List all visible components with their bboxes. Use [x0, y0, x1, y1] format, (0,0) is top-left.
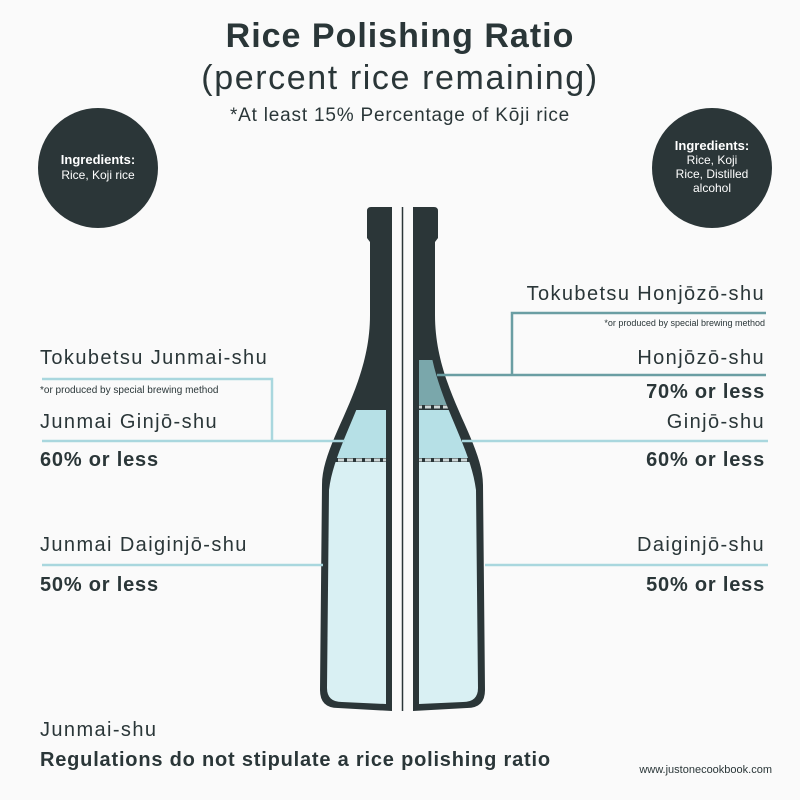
badge: left ingredients [38, 108, 158, 228]
text: *or produced by special brewing method [40, 385, 218, 396]
text: Junmai Daiginjō-shu [40, 534, 248, 556]
center divider [402, 207, 404, 711]
bottle: right half (Honjozo) [413, 207, 485, 711]
text: Daiginjō-shu [637, 534, 765, 556]
text: 60% or less [646, 449, 765, 471]
text: Ginjō-shu [667, 411, 765, 433]
right labels: Tokubetsu Honjōzō-shu [527, 283, 765, 305]
subtitle: (percent rice remaining) [201, 59, 599, 97]
text: Junmai-shu [40, 719, 157, 741]
text: 70% or less [646, 381, 765, 403]
text: 50% or less [646, 574, 765, 596]
text: 60% or less [40, 449, 159, 471]
leader lines [42, 313, 768, 565]
badge: right ingredients: Rice, Koji [687, 153, 737, 167]
title: Rice Polishing Ratio [226, 17, 574, 55]
badge: right ingredients: Rice, Distilled [676, 167, 748, 181]
bottle and leader lines [42, 207, 768, 711]
text: Honjōzō-shu [637, 347, 765, 369]
badge: left ingredients: Rice, Koji rice [61, 168, 135, 182]
badge: right ingredients: Ingredients: [675, 138, 749, 153]
text: Junmai Ginjō-shu [40, 411, 218, 433]
text: *or produced by special brewing method [604, 318, 765, 328]
badge: left ingredients: Ingredients: [61, 152, 135, 167]
url: www.justonecookbook.com [639, 764, 772, 776]
badge: right ingredients [652, 108, 772, 228]
text: 50% or less [40, 574, 159, 596]
text: Regulations do not stipulate a rice polishing ratio [40, 749, 551, 771]
note: *At least 15% Percentage of Kōji rice [230, 105, 570, 126]
bottle: left half (Junmai) [300, 207, 400, 712]
left labels: Tokubetsu Junmai-shu [40, 347, 268, 369]
badge: right ingredients: alcohol [693, 181, 731, 195]
